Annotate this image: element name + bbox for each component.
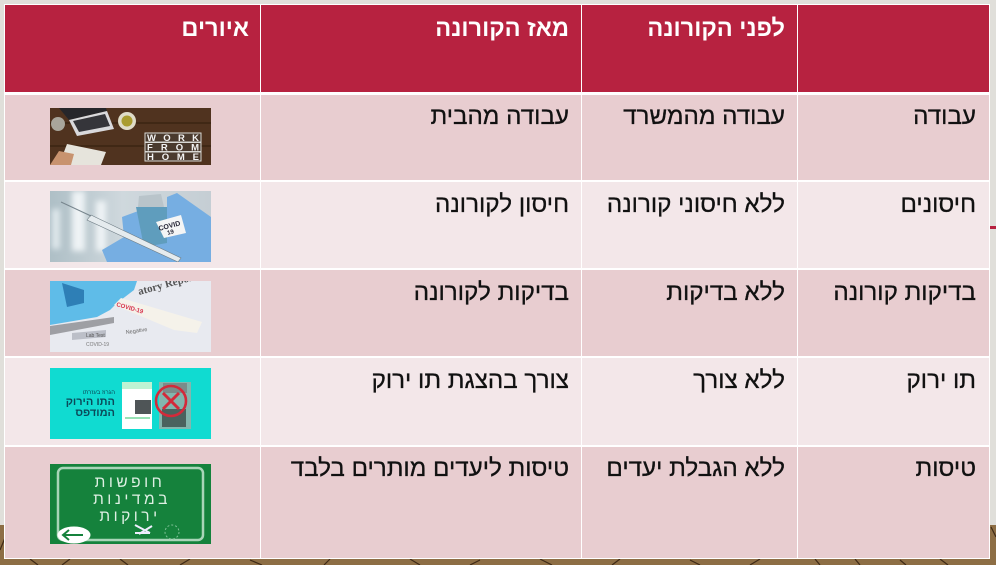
row: work before <box>582 95 797 180</box>
row: green pass before: ללא צורך <box>693 367 785 394</box>
header: illustrations <box>5 5 260 92</box>
row: flights label: טיסות <box>916 455 976 482</box>
icon: green road sign <box>50 464 211 544</box>
row: tests since <box>261 270 581 356</box>
row: work since: עבודה מהבית <box>430 103 569 130</box>
row: flights label <box>798 447 989 558</box>
report lab test field: Lab Test <box>86 333 105 339</box>
row: vaccines since: חיסון לקורונה <box>435 191 569 218</box>
row: green pass image cell <box>5 358 260 445</box>
row: work since <box>261 95 581 180</box>
icon: work from home photo <box>50 108 211 165</box>
sign plane <box>135 525 152 534</box>
header: illustrations: איורים <box>181 16 249 42</box>
row: tests before <box>582 270 797 356</box>
graphic caption: התו הירוק <box>66 396 115 408</box>
report fields: Negative <box>125 327 148 336</box>
sign arrow <box>58 526 90 544</box>
sign text: ירוקות <box>99 508 161 525</box>
row: green pass label <box>798 358 989 445</box>
row: vaccines label: חיסונים <box>901 191 976 218</box>
header: since corona <box>261 5 581 92</box>
row: vaccines since <box>261 182 581 268</box>
header: before corona: לפני הקורונה <box>647 16 785 42</box>
row: tests since: בדיקות לקורונה <box>414 279 569 306</box>
row: work label: עבודה <box>913 103 976 130</box>
icon: covid rapid test photo <box>50 281 211 352</box>
row: green pass label: תו ירוק <box>907 367 976 394</box>
row: tests image cell <box>5 270 260 356</box>
sign text: חופשות <box>95 474 165 491</box>
row: vaccines label <box>798 182 989 268</box>
row: vaccines before: ללא חיסוני קורונה <box>607 191 785 218</box>
vial label: COVID <box>158 220 181 233</box>
icon: work from home photo: FROM <box>147 142 199 154</box>
row: vaccines before <box>582 182 797 268</box>
header: since corona: מאז הקורונה <box>435 16 569 42</box>
icon: work from home photo: HOME <box>147 152 199 163</box>
row: tests before: ללא בדיקות <box>666 279 785 306</box>
row: flights before: ללא הגבלת יעדים <box>606 455 785 482</box>
row: flights since <box>261 447 581 558</box>
icon: printed green pass graphic <box>50 368 211 439</box>
graphic caption <box>66 390 115 419</box>
icon: covid vaccine and syringe photo <box>50 191 211 262</box>
accent mark on right edge <box>990 226 996 229</box>
graphic caption: המודפס <box>75 407 115 419</box>
row: flights before <box>582 447 797 558</box>
row: flights image cell <box>5 447 260 558</box>
test strip label: COVID-19 <box>115 302 144 316</box>
header: empty <box>798 5 989 92</box>
photo text: WORK <box>147 133 199 144</box>
row: green pass since <box>261 358 581 445</box>
icon: covid vaccine and syringe photo: 19 <box>167 229 175 237</box>
wood background strip <box>0 525 996 565</box>
header: before corona <box>582 5 797 92</box>
report covid field: COVID-19 <box>86 342 109 348</box>
row: tests label <box>798 270 989 356</box>
sign text <box>93 474 171 525</box>
row: work label <box>798 95 989 180</box>
row: work before: עבודה מהמשרד <box>623 103 785 130</box>
row: work image cell <box>5 95 260 180</box>
row: vaccines image cell <box>5 182 260 268</box>
row: green pass before <box>582 358 797 445</box>
row: tests label: בדיקות קורונה <box>833 279 976 306</box>
sign text: במדינות <box>93 491 171 508</box>
row: flights since: טיסות ליעדים מותרים בלבד <box>291 455 569 482</box>
row: green pass since: צורך בהצגת תו ירוק <box>372 367 569 394</box>
graphic caption: הגרוז בעזרתו <box>83 390 115 396</box>
